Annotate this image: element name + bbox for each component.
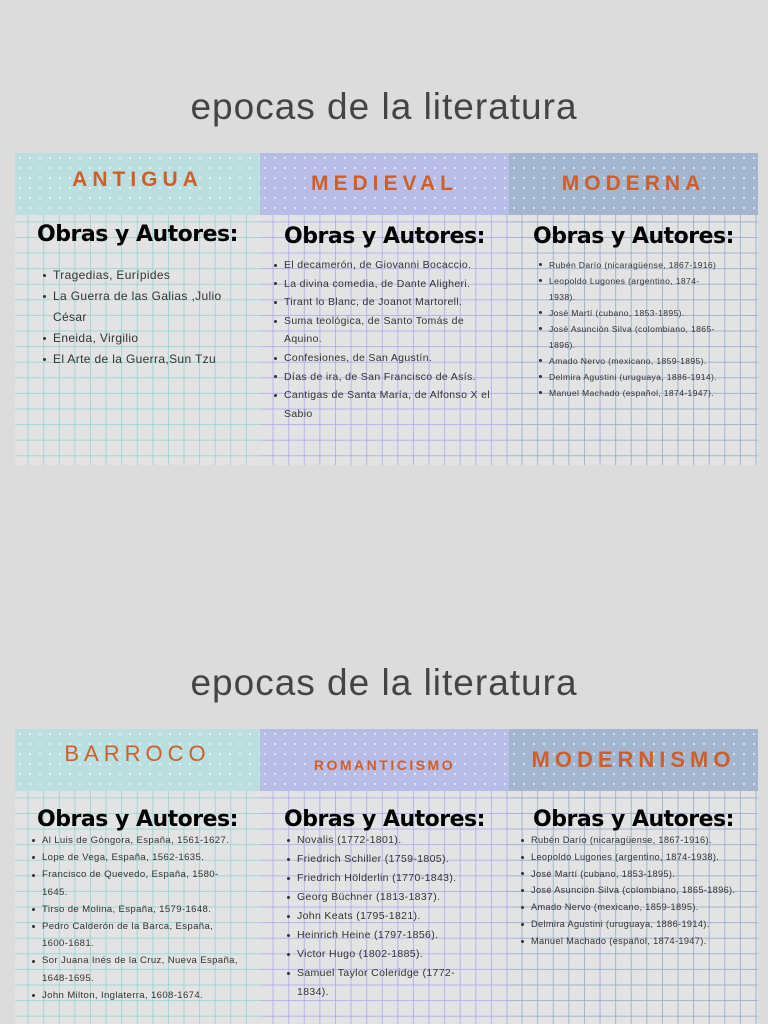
header moderna: MODERNA <box>562 172 705 195</box>
panel: barroco <box>15 729 260 1024</box>
header romanticismo <box>260 729 509 791</box>
list romanticismo: Victor Hugo (1802-1885). <box>297 948 423 960</box>
title bottom: epocas de la literatura <box>190 662 578 703</box>
header antigua <box>15 153 260 215</box>
list medieval: Tirant lo Blanc, de Joanot Martorell. <box>284 296 462 308</box>
list moderna: Manuel Machado (español, 1874-1947). <box>549 388 714 398</box>
list medieval <box>274 259 490 420</box>
list moderna: 1896). <box>549 340 575 350</box>
list antigua <box>43 268 222 366</box>
list moderna: José Martí (cubano, 1853-1895). <box>549 308 685 318</box>
panel: modernismo <box>509 729 758 1024</box>
header barroco: BARROCO <box>64 741 211 766</box>
list antigua: La Guerra de las Galias ,Julio <box>53 289 222 303</box>
list barroco: Lope de Vega, España, 1562-1635. <box>42 852 204 863</box>
list barroco: Francisco de Quevedo, España, 1580- <box>42 869 219 880</box>
heading barroco: Obras y Autores: <box>37 807 238 832</box>
list romanticismo: 1834). <box>297 986 329 998</box>
list antigua: Eneida, Virgilio <box>53 331 138 345</box>
list romanticismo <box>287 834 456 998</box>
list barroco <box>32 835 238 1001</box>
header medieval <box>260 153 509 215</box>
header modernismo <box>509 729 758 791</box>
list modernismo <box>521 835 735 946</box>
heading romanticismo: Obras y Autores: <box>284 807 485 832</box>
header moderna <box>509 153 758 215</box>
header medieval: MEDIEVAL <box>311 172 458 195</box>
list barroco: 1648-1695. <box>42 973 94 984</box>
header antigua: ANTIGUA <box>72 168 203 191</box>
list moderna: José Asunción Silva (colombiano, 1865- <box>549 324 715 334</box>
list medieval: Sabio <box>284 408 313 420</box>
header modernismo: MODERNISMO <box>532 747 736 772</box>
heading antigua: Obras y Autores: <box>37 222 238 247</box>
list antigua: El Arte de la Guerra,Sun Tzu <box>53 352 216 366</box>
list antigua: Tragedias, Eurípides <box>53 268 170 282</box>
list moderna: Delmira Agustini (uruguaya, 1886-1914). <box>549 372 717 382</box>
header barroco <box>15 729 260 791</box>
list romanticismo: John Keats (1795-1821). <box>297 910 421 922</box>
list modernismo: Rubén Darío (nicaragüense, 1867-1916). <box>531 835 712 845</box>
list modernismo: Manuel Machado (español, 1874-1947). <box>531 936 707 946</box>
list barroco: Pedro Calderón de la Barca, España, <box>42 921 213 932</box>
list romanticismo: Heinrich Heine (1797-1856). <box>297 929 438 941</box>
panel: medieval <box>260 153 509 465</box>
title top: epocas de la literatura <box>190 86 578 127</box>
list barroco: John Milton, Inglaterra, 1608-1674. <box>42 990 203 1001</box>
list medieval: Cantigas de Santa María, de Alfonso X el <box>284 389 490 401</box>
panel: antigua <box>15 153 260 465</box>
panel: moderna <box>509 153 758 465</box>
list barroco: 1600-1681. <box>42 938 94 949</box>
list medieval: Suma teológica, de Santo Tomás de <box>284 315 464 327</box>
list modernismo: Delmira Agustini (uruguaya, 1886-1914). <box>531 919 710 929</box>
list romanticismo: Friedrich Schiller (1759-1805). <box>297 853 449 865</box>
list moderna: Leopoldo Lugones (argentino, 1874- <box>549 276 699 286</box>
header romanticismo: ROMANTICISMO <box>314 757 455 773</box>
list romanticismo: Novalis (1772-1801). <box>297 834 401 846</box>
list medieval: Días de ira, de San Francisco de Asís. <box>284 371 476 383</box>
list moderna: Rubén Darío (nicaragüense, 1867-1916) <box>549 260 716 270</box>
heading medieval: Obras y Autores: <box>284 224 485 249</box>
list medieval: La divina comedia, de Dante Aligheri. <box>284 278 470 290</box>
list modernismo: Leopoldo Lugones (argentino, 1874-1938). <box>531 852 719 862</box>
list barroco: Al Luis de Góngora, España, 1561-1627. <box>42 835 229 846</box>
list romanticismo: Samuel Taylor Coleridge (1772- <box>297 967 455 979</box>
heading modernismo: Obras y Autores: <box>533 807 734 832</box>
list modernismo: José Asunción Silva (colombiano, 1865-1896). <box>531 885 735 895</box>
list medieval: Confesiones, de San Agustín. <box>284 352 432 364</box>
list modernismo: Amado Nervo (mexicano, 1859-1895). <box>531 902 699 912</box>
list antigua: César <box>53 310 87 324</box>
heading moderna: Obras y Autores: <box>533 224 734 249</box>
list romanticismo: Friedrich Hölderlin (1770-1843). <box>297 872 456 884</box>
list moderna <box>539 260 717 398</box>
list medieval: Aquino. <box>284 333 322 345</box>
panel: romanticismo <box>260 729 509 1024</box>
list modernismo: José Martí (cubano, 1853-1895). <box>531 869 675 879</box>
list barroco: 1645. <box>42 887 68 898</box>
list medieval: El decamerón, de Giovanni Bocaccio. <box>284 259 471 271</box>
list romanticismo: Georg Büchner (1813-1837). <box>297 891 440 903</box>
list barroco: Tirso de Molina, España, 1579-1648. <box>42 904 211 915</box>
list moderna: Amado Nervo (mexicano, 1859-1895). <box>549 356 707 366</box>
list barroco: Sor Juana Inés de la Cruz, Nueva España, <box>42 955 238 966</box>
list moderna: 1938). <box>549 292 575 302</box>
